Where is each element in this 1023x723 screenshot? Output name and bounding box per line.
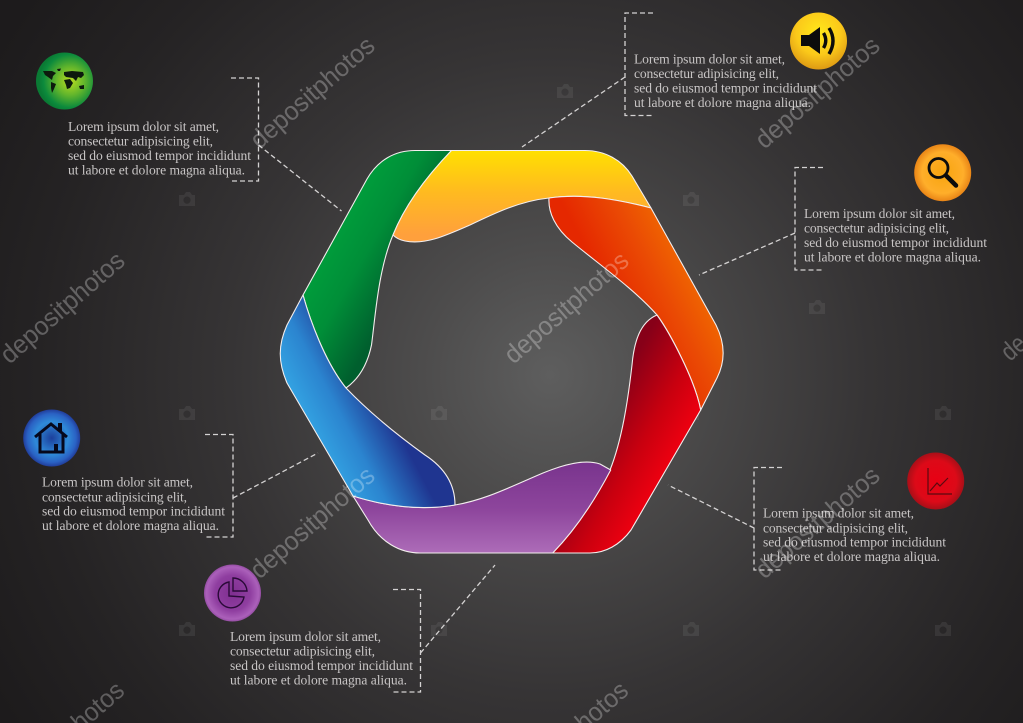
text block: consectetur adipisicing elit,	[763, 520, 908, 535]
text block: ut labore et dolore magna aliqua.	[804, 250, 981, 264]
text block	[68, 119, 251, 178]
segment: dark red	[553, 315, 701, 553]
segment: green	[303, 150, 452, 388]
text block: sed do eiusmod tempor incididunt	[230, 658, 413, 673]
text block: sed do eiusmod tempor incididunt	[763, 535, 946, 550]
segment: yellow	[393, 150, 651, 242]
text block: sed do eiusmod tempor incididunt	[42, 504, 225, 519]
bracket and leader	[668, 468, 782, 570]
watermarks: depositphotos	[498, 245, 634, 369]
callout: speaker, top	[522, 12, 847, 147]
bracket and leader	[231, 78, 342, 211]
text block: ut labore et dolore magna aliqua.	[230, 672, 407, 688]
callout: search, right	[699, 144, 987, 275]
icon: line chart	[907, 452, 964, 510]
icon: pie chart	[204, 564, 261, 622]
segment: orange	[549, 196, 723, 410]
watermarks: depositphotos	[244, 460, 380, 584]
text block: sed do eiusmod tempor incididunt	[634, 80, 817, 96]
text block	[763, 506, 946, 564]
segment: purple	[353, 462, 611, 553]
text block: ut labore et dolore magna aliqua.	[68, 162, 245, 178]
callout: world, top left	[36, 52, 342, 211]
bracket and leader	[205, 434, 318, 537]
text block: Lorem ipsum dolor sit amet,	[763, 506, 914, 521]
text block	[42, 475, 225, 533]
text block: Lorem ipsum dolor sit amet,	[230, 629, 381, 644]
watermarks: depositphotos	[749, 30, 885, 154]
bracket and leader	[522, 13, 653, 147]
text block: Lorem ipsum dolor sit amet,	[804, 206, 955, 221]
text block: Lorem ipsum dolor sit amet,	[634, 51, 785, 66]
icon: speaker	[790, 12, 847, 70]
watermarks: depositphotos	[244, 30, 380, 154]
watermarks: depositphotos	[749, 460, 885, 584]
text block: Lorem ipsum dolor sit amet,	[68, 119, 219, 134]
callout: pie chart, bottom	[204, 564, 495, 692]
text block	[634, 51, 817, 110]
text block: Lorem ipsum dolor sit amet,	[42, 475, 193, 490]
text block: consectetur adipisicing elit,	[230, 644, 375, 659]
panel: hexagon ring	[280, 150, 723, 553]
icon: magnifier	[914, 144, 971, 201]
text block: ut labore et dolore magna aliqua.	[634, 95, 811, 110]
text block: consectetur adipisicing elit,	[68, 134, 213, 149]
bracket and leader	[699, 168, 823, 275]
callout: chart, lower right	[668, 452, 964, 570]
text block: consectetur adipisicing elit,	[42, 489, 187, 504]
text block: consectetur adipisicing elit,	[634, 66, 779, 81]
segment: blue	[280, 295, 455, 508]
text block	[230, 629, 413, 688]
text block: consectetur adipisicing elit,	[804, 221, 949, 236]
text block: sed do eiusmod tempor incididunt	[68, 148, 251, 163]
callout: home, lower left	[23, 410, 318, 537]
text block: sed do eiusmod tempor incididunt	[804, 235, 987, 250]
text block: ut labore et dolore magna aliqua.	[42, 518, 219, 533]
icon: house	[23, 410, 80, 466]
text block: ut labore et dolore magna aliqua.	[763, 549, 940, 564]
icon: world map	[36, 52, 93, 110]
bracket and leader	[393, 565, 495, 692]
watermark camera marks	[179, 84, 951, 636]
text block	[804, 206, 987, 264]
